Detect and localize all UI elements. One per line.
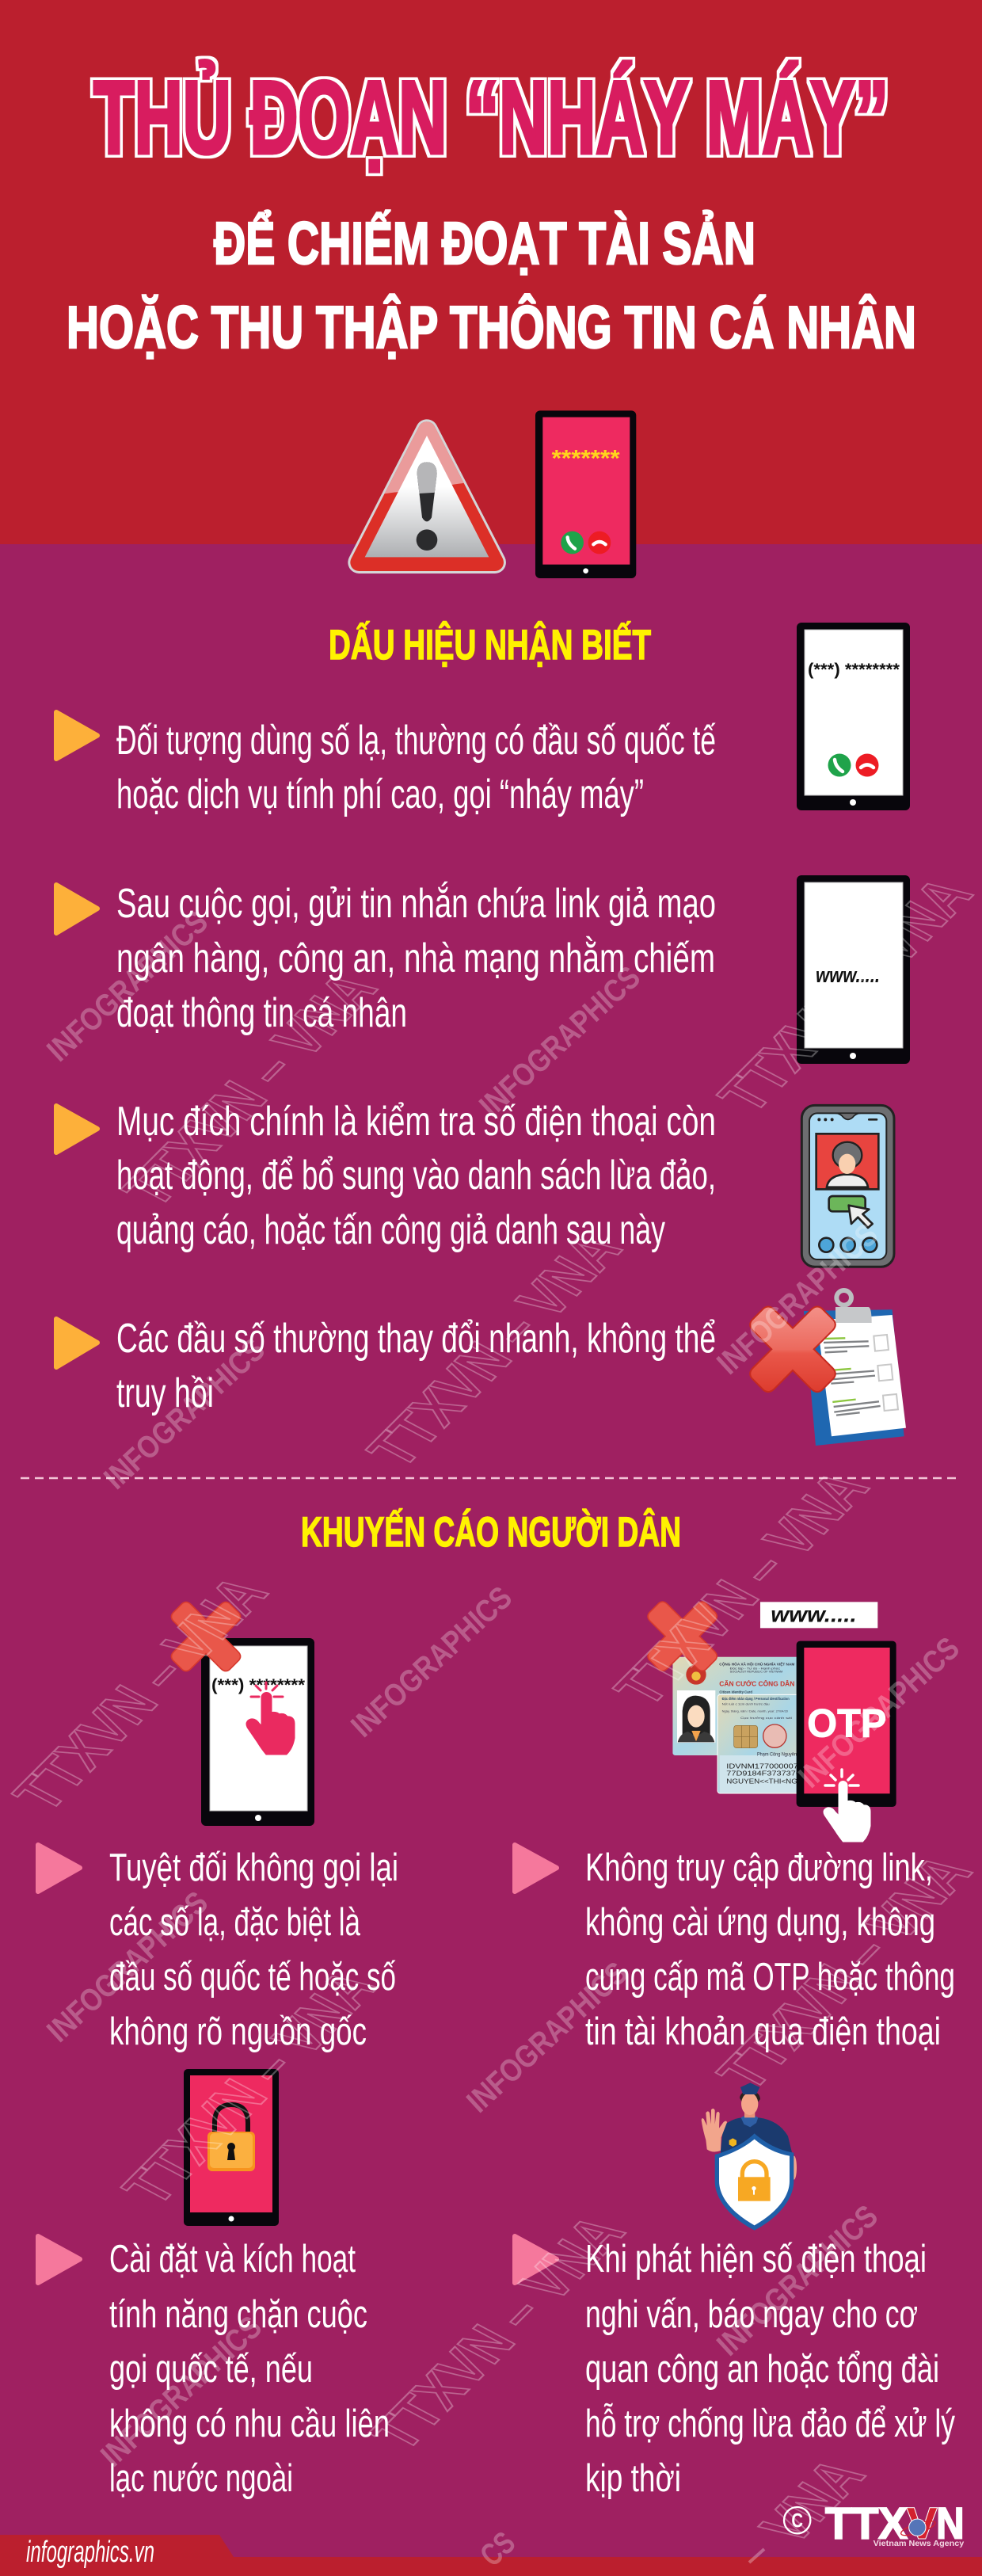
icon: phone incoming number: (***) ******** [808,661,900,679]
bullet arrow [56,712,97,759]
watermarks: INFOGRAPHICS [710,2199,885,2363]
red cross [648,1602,717,1671]
advice text [109,1846,398,2053]
advice text [585,1846,955,2053]
bullet arrow [515,1845,557,1892]
icon: locked phone [184,2069,279,2226]
icon: warning triangle [359,430,495,562]
url box [760,1602,877,1628]
bullet arrow [56,1319,97,1367]
advice text: tính năng chặn cuộc [109,2293,367,2336]
item 1 [56,712,716,817]
watermarks: CS [474,2525,522,2574]
advice 2 [515,1845,955,2053]
item text [116,718,716,817]
bullet arrow [56,885,97,933]
advice text: gọi quốc tế, nếu [109,2348,313,2391]
id card: IDVNM1770000076 [726,1762,803,1770]
watermarks: INFOGRAPHICS [40,905,215,1069]
watermarks [0,868,982,2574]
icon: phone with link [797,875,910,1064]
advice text [585,2238,955,2500]
icon: phone incoming number [797,623,910,810]
advice text [109,2238,390,2500]
logo: TTXVN: TTX [825,2498,908,2547]
advice text: Tuyệt đối không gọi lại [109,1846,398,1889]
item text: Mục đích chính là kiểm tra số điện thoại còn [116,1099,716,1145]
title [67,59,916,360]
red cross [171,1602,241,1671]
advice text: Cài đặt và kích hoạt [109,2238,356,2281]
watermarks: INFOGRAPHICS [710,1218,885,1381]
OTP phone: OTP [807,1701,886,1746]
item text: Đối tượng dùng số lạ, thường có đầu số quốc tế [116,718,716,764]
logo: TTXVN: Vietnam News Agency [874,2540,965,2548]
icon: phone with link: www..... [816,963,880,987]
footer band with site tab [0,2535,982,2576]
id card: Cục trưởng cục cảnh sát [740,1716,793,1720]
icon: link, ID card and OTP phone [648,1602,896,1807]
advice text: không có nhu cầu liên [109,2403,390,2445]
id card: CĂN CƯỚC CÔNG DÂN [719,1680,795,1687]
advice 3 [38,2236,390,2500]
item text: Các đầu số thường thay đổi nhanh, không thể [116,1316,716,1362]
watermarks: INFOGRAPHICS [473,960,647,1124]
watermarks: TTXVN – VNA [354,1223,636,1477]
logo: TTXVN: V [907,2498,937,2547]
item text [116,1316,716,1416]
watermarks: TTXVN – VNA [601,1461,883,1715]
id card [672,1657,803,1793]
bullet arrow [515,2236,557,2283]
watermarks: INFOGRAPHICS [94,2310,268,2474]
watermarks: INFOGRAPHICS [97,1332,272,1496]
icon: phone with tapping hand [171,1602,314,1826]
advice text: lạc nước ngoài [109,2457,293,2500]
watermarks: TTXVN – VNA [109,1961,391,2214]
id card: Nốt ruồi c 1cm dưới trước đầu [722,1702,770,1706]
item text: hoặc dịch vụ tính phí cao, gọi “nháy máy” [116,772,644,817]
watermarks: INFOGRAPHICS [460,1956,634,2120]
heading: signs: DẤU HIỆU NHẬN BIẾT [329,620,651,669]
item 4 [56,1316,716,1416]
advice 1 [38,1845,398,2053]
id card: CỘNG HÒA XÃ HỘI CHỦ NGHĨA VIỆT NAM [719,1660,794,1666]
icon: phone with tapping hand: (***) ******** [211,1676,306,1694]
site name: infographics.vn [26,2536,154,2569]
icon: phone with hidden caller: ******* [552,445,620,471]
logo: TTXVN [784,2498,965,2548]
item text: đoạt thông tin cá nhân [116,990,407,1036]
item text: hoạt động, để bổ sung vào danh sách lừa đảo, [116,1153,716,1198]
bullet arrow [56,1106,97,1153]
heading: recommendations: KHUYẾN CÁO NGƯỜI DÂN [301,1507,681,1556]
divider [21,1477,961,1479]
advice text: các số lạ, đặc biệt là [109,1901,361,1944]
logo: TTXVN: N [936,2498,965,2547]
id card: Độc lập - Tự do - Hạnh phúc [730,1667,780,1671]
bullet arrow [38,1845,80,1892]
item 2 [56,881,716,1036]
id card: Citizen Identity Card [719,1690,752,1695]
OTP phone [797,1641,896,1807]
subtitle line 1: ĐỂ CHIẾM ĐOẠT TÀI SẢN [214,210,756,276]
header band [0,0,982,544]
item text [116,1099,716,1253]
item 3 [56,1099,716,1253]
id card: NGUYEN<<THI<NGU [726,1778,803,1785]
item text: truy hồi [116,1370,214,1416]
watermarks: TTXVN – VNA [109,962,391,1216]
id card: 77D9184F3737376I [726,1770,803,1778]
watermarks: TTXVN – VNA [357,2206,639,2460]
item text: Sau cuộc gọi, gửi tin nhắn chứa link giả mạo [116,881,716,927]
advice 4 [515,2236,955,2500]
id card: Phạm Công Nguyên [757,1753,797,1758]
watermarks: INFOGRAPHICS [344,1580,519,1744]
logo: TTXVN: C [791,2510,803,2532]
id card: Đặc điểm nhân dạng / Personal identification [722,1697,790,1701]
advice text: kịp thời [585,2457,681,2500]
item text: ngân hàng, công an, nhà mạng nhằm chiếm [116,936,715,981]
icon: phone with hidden caller [535,410,636,578]
item text: quảng cáo, hoặc tấn công giả danh sau này [116,1207,665,1253]
watermarks: INFOGRAPHICS [40,1885,215,2049]
icon: smartphone with profile [801,1105,894,1267]
url box: www..... [771,1602,857,1627]
red cross [750,1306,835,1392]
watermarks: TTXVN – VNA [0,1567,282,1820]
watermarks: VNA [747,2449,879,2553]
advice text: đầu số quốc tế hoặc số [109,1956,396,1999]
bullet arrow [38,2236,80,2283]
item text [116,881,716,1036]
icon: clipboard with red cross [750,1290,906,1446]
icon: police officer with shield [702,2083,797,2231]
id card: SOCIALIST REPUBLIC OF VIETNAM [730,1671,782,1674]
advice text: không rõ nguồn gốc [109,2010,367,2053]
icon: white tapping hand [824,1770,870,1841]
id card: Ngày, tháng, năm / Date, month, year: 27/04/20 [722,1709,789,1713]
